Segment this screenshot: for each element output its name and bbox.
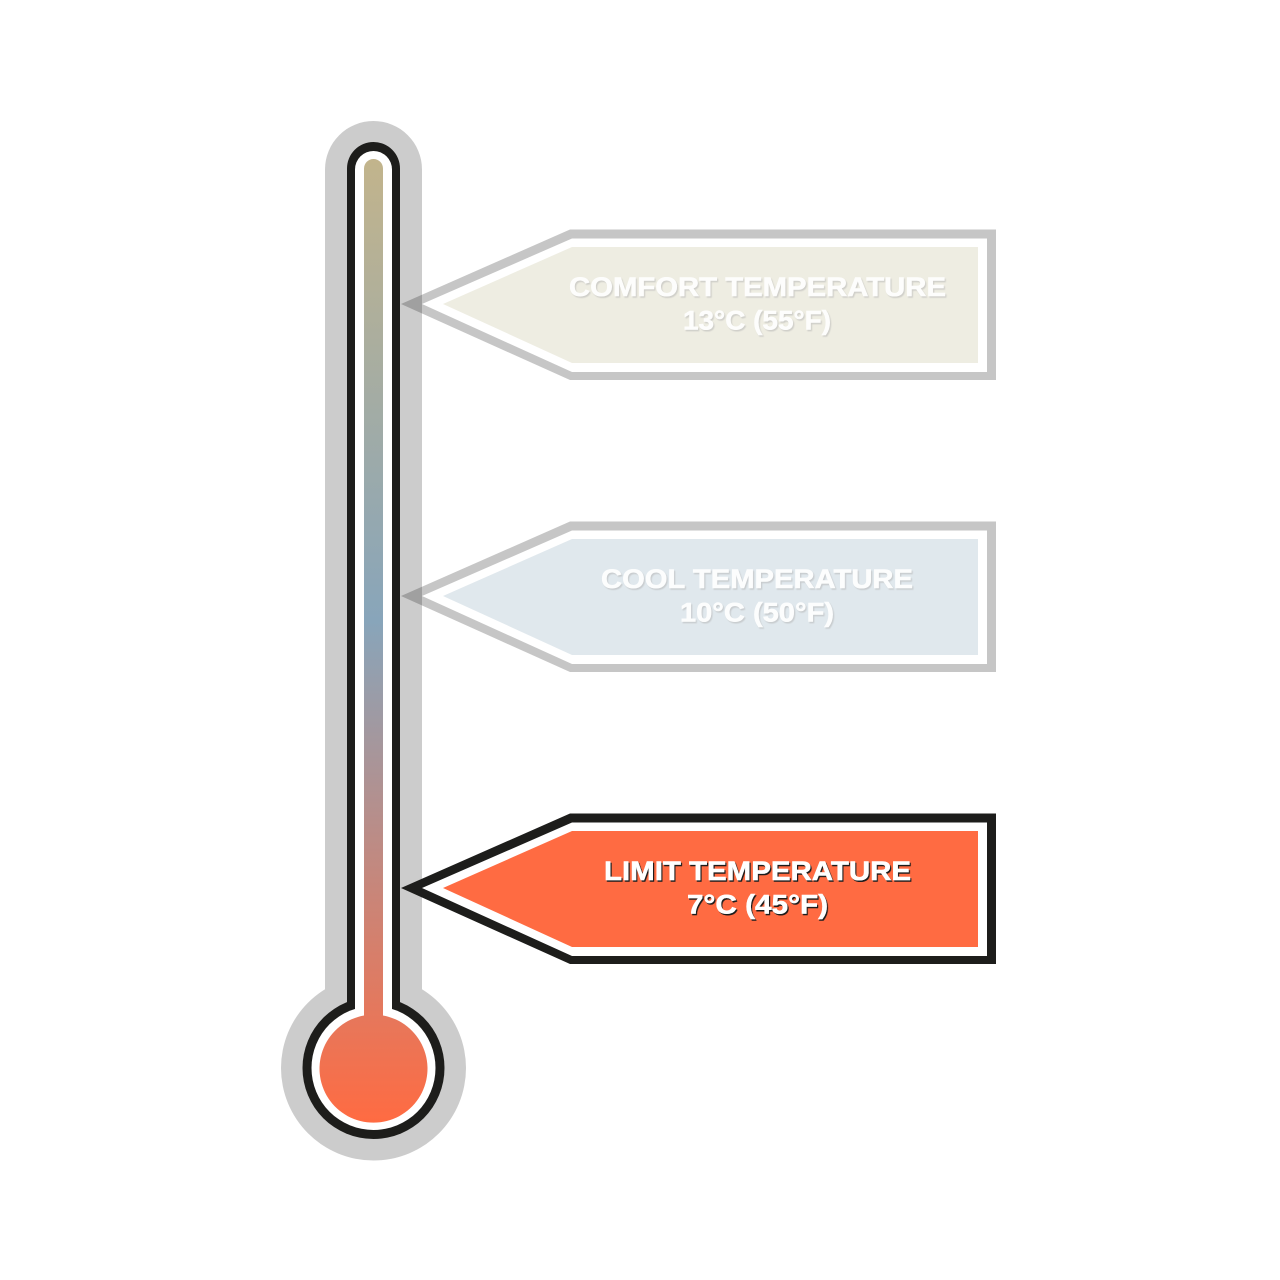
limit arrow fill — [443, 831, 978, 947]
thermometer gradient liquid — [320, 159, 428, 1123]
cool value: 10°C (50°F) — [680, 598, 834, 628]
limit heading: LIMIT TEMPERATURE — [604, 856, 911, 886]
comfort arrow fill — [443, 247, 978, 363]
limit arrow border — [401, 814, 996, 964]
thermometer black outline — [302, 142, 444, 1139]
cool heading: COOL TEMPERATURE — [601, 564, 913, 594]
thermometer white gap — [312, 151, 436, 1130]
thermometer — [281, 121, 466, 1160]
comfort heading: COMFORT TEMPERATURE — [569, 272, 946, 302]
comfort value: 13°C (55°F) — [683, 306, 831, 336]
callout: limit temperature — [401, 814, 996, 964]
limit value: 7°C (45°F) — [687, 890, 828, 920]
callout: comfort temperature — [401, 230, 996, 380]
comfort arrow border — [401, 230, 996, 380]
cool arrow fill — [443, 539, 978, 655]
thermometer outer halo — [281, 121, 466, 1160]
callout: cool temperature — [401, 522, 996, 672]
cool arrow border — [401, 522, 996, 672]
